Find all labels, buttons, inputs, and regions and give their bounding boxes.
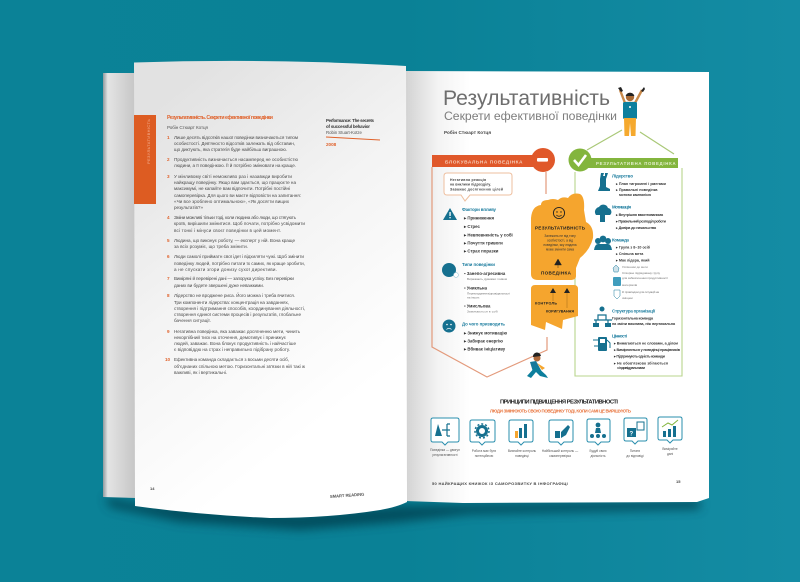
- behaviour types list: на інших: [467, 296, 480, 300]
- team list: Створює підрядовану групу: [622, 271, 660, 275]
- principles heading: ПРИНЦИПИ ПІДВИЩЕННЯ РЕЗУЛЬТАТИВНОСТІ: [500, 400, 618, 406]
- connector lines from person: [587, 130, 674, 154]
- numbered list of takeaways: створення єдиної системи процесів і результатів, глобальне: [174, 312, 301, 317]
- running footer: SMART READING: [330, 492, 365, 499]
- behaviour types list: Виражають думками і гнівом: [467, 277, 507, 281]
- orange side tab: [134, 115, 156, 204]
- speech bubble: Негативна реакція: [450, 178, 486, 182]
- factors list: ▸ Стрес: [463, 224, 481, 229]
- icon 4: feedback: Найбільший контроль —: [542, 449, 579, 453]
- numbered list of takeaways: людей, заважає. Вона блокує продуктивність і найчастіше: [174, 340, 296, 346]
- values list: ▸ Не обов'язково збігаються: [613, 362, 668, 366]
- principle icons row: [430, 417, 682, 458]
- numbered list of takeaways: даних ви будете звершені дуже неважкими.: [174, 283, 264, 288]
- principles heading: [490, 400, 631, 414]
- numbered list of takeaways: «Чи все зроблено оптимальною», «Як досягти вищих: [174, 199, 290, 204]
- numbered list of takeaways: [165, 135, 306, 375]
- numbered list of takeaways: є відповіддю на страх і неправильно підібрану роботу.: [174, 347, 290, 352]
- red banner: [432, 148, 555, 172]
- icon 3: controlling behaviour: поведінці: [515, 454, 529, 458]
- right page: [405, 71, 709, 503]
- values list: з індивідуальними: [617, 366, 645, 370]
- numbered list of takeaways: 6: [167, 254, 170, 259]
- title: Секрети ефективної поведінки: [444, 109, 617, 123]
- organisation list: [612, 308, 676, 326]
- icon 6: ask questions: [624, 418, 647, 458]
- icon 2: work as development: Робота має бути: [472, 449, 496, 453]
- icon 7: growth chart: [658, 417, 682, 456]
- control and correction block: КОНТРОЛЬ: [535, 302, 557, 306]
- numbered list of takeaways: 7: [167, 276, 170, 281]
- numbered list of takeaways: найкращу поведінку. Якщо вам здається, що працюєте на: [174, 179, 296, 185]
- fist: performance: може змінити сама: [546, 248, 574, 252]
- icon: warning triangle: [443, 208, 457, 220]
- title: Результативність: [443, 86, 610, 110]
- numbered list of takeaways: самоперевірка. Для цього ви маєте відповісти на запитання:: [174, 193, 301, 198]
- fist: performance: ПОВЕДІНКА: [541, 270, 572, 276]
- icon: leadership figure: [598, 173, 610, 191]
- numbered list of takeaways: Люди самолі прийматн свої ідеї і відхиляти чужі. Щоб змінити: [174, 253, 304, 259]
- numbered list of takeaways: Продуктивність визначається насамперед не особистістю: [174, 157, 299, 162]
- icon 7: growth chart: Виміряйте: [662, 447, 678, 451]
- book shadow: [105, 497, 700, 530]
- values list: Цінності: [612, 334, 627, 338]
- team list: [612, 238, 668, 300]
- title: Робін Стюарт Котця: [444, 129, 491, 135]
- numbered list of takeaways: Три компоненти лідерства: концентрація на завданнях,: [174, 300, 289, 305]
- numbered list of takeaways: важливі, як і вертикальні.: [174, 370, 227, 375]
- leadership list: ▸ Правильні поведінка: [615, 188, 658, 192]
- left page heading: [167, 114, 273, 130]
- team list: ▸ Мак лідера, який: [615, 258, 650, 262]
- green banner: РЕЗУЛЬТАТИВНА ПОВЕДІНКА: [596, 161, 676, 166]
- behaviour types list: ▪ Уникльна: [464, 286, 488, 290]
- numbered list of takeaways: Виміряні й перевірені дані — запорука успіху. Без перевірки: [174, 275, 294, 281]
- icon: team: [594, 236, 612, 250]
- icon 2: work as development: [470, 420, 496, 458]
- control and correction block: [531, 285, 578, 330]
- values list: ▸ Вимірюються у поведінці працівників: [613, 348, 681, 352]
- speech bubble: [444, 173, 512, 201]
- icon 4: feedback: самоперевірка: [549, 454, 571, 458]
- motivation list: ▸ Довіра до начальства: [615, 226, 657, 230]
- numbered list of takeaways: Людина, що виконує роботу, — експерт у ній. Вона краще: [174, 237, 295, 243]
- icon: successful person with raised arms: [618, 87, 645, 136]
- numbered list of takeaways: особистості. Дев'яносто відсотків залежать від обставин,: [174, 141, 295, 146]
- green banner: [568, 148, 678, 172]
- team list: Є прикладом для ситуацій на: [622, 290, 659, 294]
- icon 2: work as development: потенційною: [475, 454, 494, 458]
- original book note: of successful behavior: [326, 124, 370, 129]
- numbered list of takeaways: бачення ситуації.: [174, 318, 211, 323]
- values list: ▸ Вимагаються не словами, а ділом: [613, 342, 678, 346]
- numbered list of takeaways: максимумі, не капайте вам відпочити. Потрібні постійні: [174, 185, 290, 191]
- icon 4: feedback: [542, 420, 579, 458]
- numbered list of takeaways: Лише десять відсотків нашої поведінки визначаються типом: [174, 135, 298, 140]
- team list: Успішним до мети: [622, 265, 648, 269]
- behaviour types list: Перекладання відповідальності: [467, 292, 510, 296]
- speech bubble: Заважає досягненню цілей: [450, 188, 503, 192]
- original book note: Robin Stuart-Kotze: [326, 130, 363, 135]
- numbered list of takeaways: 5: [167, 238, 170, 243]
- numbered list of takeaways: об'єднаних спільною метою. Горизонтальні зв'язки в ній такі ж: [174, 363, 306, 369]
- numbered list of takeaways: Лідерство не вроджене риса. Його можна і треба вчитися.: [174, 291, 295, 298]
- fist: performance: поведінки, яку людина: [543, 243, 577, 247]
- left page: [134, 61, 407, 518]
- right page footer: 50 НАЙКРАЩИХ КНИЖОК ІЗ САМОРОЗВИТКУ В ІНФОГРАФІЦІ: [432, 481, 568, 486]
- consequences list: ▸ Забирає енергію: [463, 338, 503, 344]
- behaviour types list: ▪ Умисльова: [464, 304, 491, 308]
- organisation list: на зміни важлива, ніж вертикальна: [612, 322, 676, 326]
- organisation list: Структура організації: [612, 308, 656, 314]
- right page number: 15: [676, 479, 681, 484]
- team list: ▸ Спільна мета: [615, 252, 644, 256]
- team list: Команда: [612, 238, 630, 242]
- back pages of left side: [103, 73, 136, 498]
- numbered list of takeaways: кроїв, вирішили змінитися. Щоб почати, потрібно усвідомити: [174, 221, 305, 226]
- numbered list of takeaways: всі тонкі і мінуси своєї поведінки в цей момент.: [174, 227, 281, 233]
- leadership list: Лідерство: [612, 174, 633, 178]
- icon: sitting sad figure: [527, 352, 548, 378]
- left page heading: Робін Стюарт Котця: [167, 125, 208, 130]
- numbered list of takeaways: 3: [167, 174, 170, 179]
- numbered list of takeaways: Зміни можливі тільки тоді, коли людина або люди, що стягують: [174, 215, 297, 220]
- numbered list of takeaways: що диктують, яка стратегія буде найбільш виграшною.: [174, 146, 287, 152]
- icon 6: ask questions: Питати: [630, 449, 640, 453]
- consequences list: [462, 322, 507, 352]
- factors list: ▸ Приниження: [463, 216, 495, 220]
- factors list: ▸ Почуття тривоги: [463, 240, 503, 246]
- icon 1: behaviour is the key: Поведінка — двигун: [430, 448, 460, 452]
- icon: smiley: [553, 207, 565, 219]
- orange side tab: РЕЗУЛЬТАТИВНІСТЬ: [146, 119, 151, 164]
- team list: матеріалів: [622, 283, 638, 287]
- numbered list of takeaways: результатів?»: [174, 205, 203, 210]
- icon 1: behaviour is the key: результативності: [432, 453, 458, 457]
- numbered list of takeaways: 10: [165, 357, 171, 362]
- numbered list of takeaways: 8: [167, 293, 170, 298]
- leadership list: мотиви кампанією: [619, 193, 651, 197]
- factors list: [462, 207, 513, 254]
- fist: performance: РЕЗУЛЬТАТИВНІСТЬ: [535, 226, 586, 230]
- numbered list of takeaways: 4: [167, 215, 170, 220]
- speech bubble: на виклики підрозділу.: [450, 182, 491, 186]
- icon: organisation structure: [593, 306, 612, 327]
- icon 5: leader: діяльність: [590, 454, 606, 458]
- numbered list of takeaways: некорпібний тиск на оточення, демотивує і принижує: [174, 334, 287, 340]
- factors list: ▸ Страх поразки: [463, 248, 499, 254]
- consequences list: ▸ Знижує мотивацію: [463, 330, 507, 336]
- icon 3: controlling behaviour: Визнайте контроль: [508, 449, 536, 453]
- icon: values gas pump: [593, 337, 610, 351]
- numbered list of takeaways: 9: [167, 329, 170, 334]
- values list: [612, 334, 681, 370]
- motivation list: ▸ Правильний розподіл роботи: [615, 220, 667, 224]
- consequences list: ▸ Вбиває ініціативу: [463, 346, 506, 352]
- motivation list: ▸ Внутрішня вмонтованима: [615, 213, 664, 217]
- left page heading: Результативність. Секрети ефективної поведінки: [167, 114, 273, 121]
- team list: ▸ Група з 8–10 осіб: [615, 246, 651, 250]
- numbered list of takeaways: а не спускати згори донизу сухої директиви.: [174, 267, 277, 272]
- control and correction block: КОРИГУВАННЯ: [546, 310, 574, 314]
- fist: performance: особистості, а від: [547, 238, 573, 242]
- team list: для забезпечення продуктивності: [622, 276, 668, 280]
- original book note: 2008: [326, 142, 337, 147]
- original book note: [326, 118, 380, 147]
- title: [443, 86, 617, 135]
- icon: sad face: [442, 320, 456, 332]
- values list: ▸ Підтримують єдність команди: [613, 354, 666, 358]
- numbered list of takeaways: поведінку людей, потрібно питати їх самих, як краще зробити,: [174, 260, 305, 266]
- numbered list of takeaways: 1: [167, 135, 170, 140]
- icon: head in profile: [442, 263, 458, 277]
- fist: performance: Залежить не від типу: [544, 234, 576, 238]
- red banner: БЛОКУВАЛЬНА ПОВЕДІНКА: [445, 160, 523, 166]
- factors list: Фактори впливу: [462, 207, 497, 212]
- factors list: ▸ Невпевненість у собі: [463, 232, 513, 238]
- icon 6: ask questions: ?: [630, 432, 634, 438]
- icon: motivation cloud: [595, 205, 611, 222]
- original book note: Performance: The secrets: [326, 118, 375, 123]
- behaviour types list: Замикаються в собі: [467, 310, 498, 314]
- panel: effective behaviour: [568, 148, 682, 376]
- numbered list of takeaways: за всіх розуміє, що треба змінити.: [174, 244, 248, 249]
- leadership list: ▸ План тигромені і рмегами: [615, 182, 667, 186]
- icon 7: growth chart: дані: [667, 452, 673, 456]
- numbered list of takeaways: людини, а її поведінкою. Її й потрібно змінювати на краще.: [174, 162, 296, 168]
- icon 3: controlling behaviour: [508, 420, 536, 458]
- numbered list of takeaways: створення і підтримання способів, координування діяльності,: [174, 306, 305, 311]
- numbered list of takeaways: Негативна поведінка, яка заважає досягненню мети, чинить: [174, 329, 301, 334]
- behaviour types list: ▪ Занепо-агресивна: [464, 271, 506, 276]
- left page number: 14: [150, 486, 155, 491]
- fist: performance: [531, 194, 593, 280]
- motivation list: [612, 204, 667, 230]
- numbered list of takeaways: У мінливому світі неможливо раз і назавжди виробити: [174, 174, 292, 179]
- principles heading: ЛЮДИ ЗМІНЮЮТЬ СВОЮ ПОВЕДІНКУ ТОДІ, КОЛИ САМІ ЦЕ ВИРІШУЮТЬ: [490, 408, 631, 414]
- behaviour types list: [462, 262, 510, 314]
- icon 6: ask questions: до відповіді: [626, 454, 644, 458]
- consequences list: До чого призводить: [462, 322, 505, 326]
- numbered list of takeaways: Ефективна команда складається з восьми десяти осіб,: [174, 357, 289, 362]
- team list: зміщені: [622, 296, 633, 300]
- leadership list: [612, 174, 667, 197]
- organisation list: Горизонтальна команда: [612, 316, 654, 320]
- icon 5: leader: [587, 419, 610, 458]
- behaviour types list: Типи поведінки: [462, 262, 495, 267]
- motivation list: Мотивація: [612, 204, 631, 210]
- numbered list of takeaways: 2: [167, 157, 170, 162]
- icon 1: behaviour is the key: [430, 418, 460, 457]
- panel: blocking behaviour: [432, 148, 555, 377]
- icon 5: leader: Будуй свою: [589, 449, 607, 453]
